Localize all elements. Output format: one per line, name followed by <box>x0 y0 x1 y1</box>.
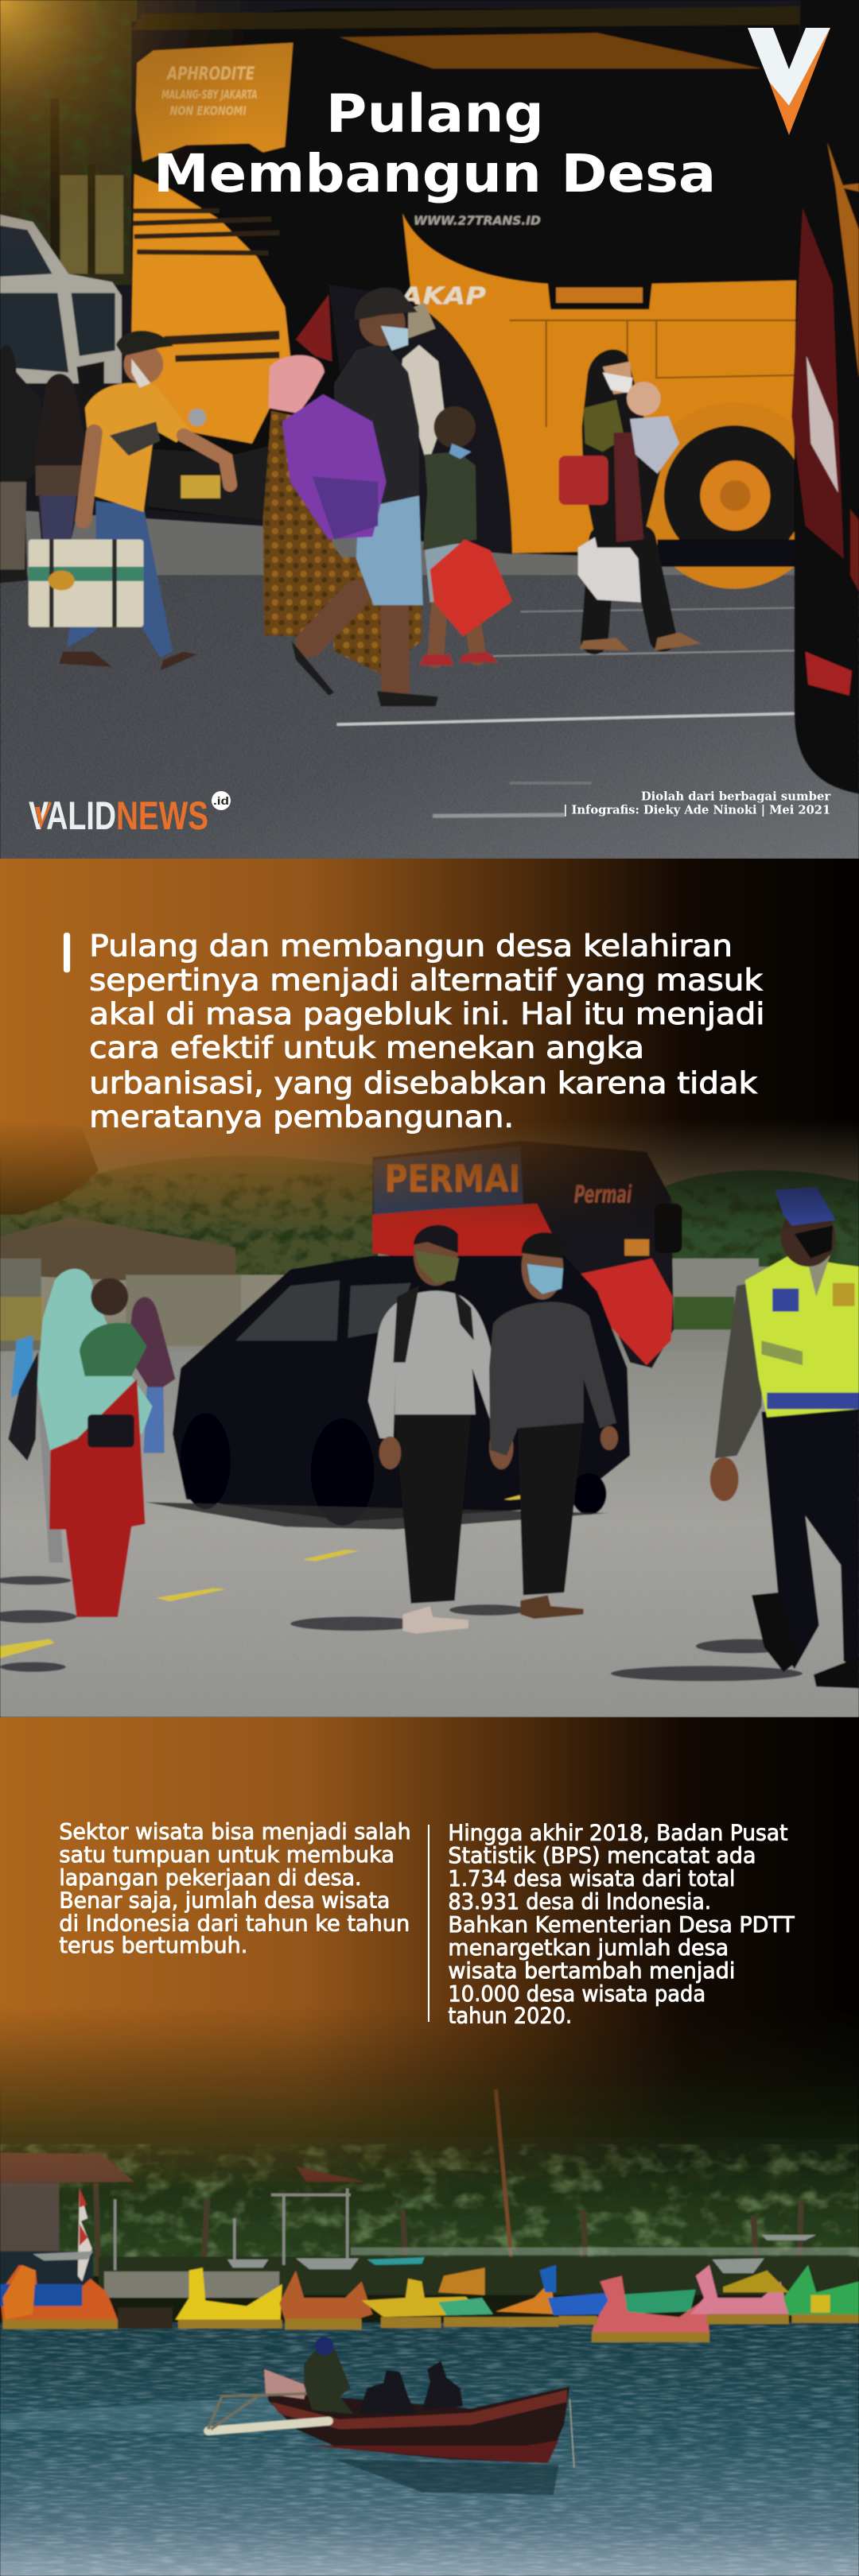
woman with child and others <box>8 1269 175 1617</box>
right text column: 10.000 desa wisata pada <box>448 1981 705 2007</box>
traffic police officer <box>710 1187 859 1689</box>
red bus: Permai <box>574 1181 632 1209</box>
dark-to-amber gradient block <box>0 859 859 1231</box>
arrivals photo: travellers at terminal <box>0 859 859 1717</box>
woman passenger <box>359 2370 416 2414</box>
right text column: tahun 2020. <box>448 2003 572 2028</box>
logo: Validnews: VALID <box>29 793 116 838</box>
left text column: terus bertumbuh. <box>59 1933 247 1958</box>
man with purple backpack <box>282 288 438 707</box>
dark-to-amber gradient block <box>0 1717 859 2199</box>
windscreen lettering <box>161 64 258 118</box>
windscreen lettering: NON EKONOMI <box>170 104 247 118</box>
cardboard box <box>29 539 143 627</box>
panel: tourism villages text over lake photo <box>0 1717 859 2576</box>
buildings <box>0 1217 235 1280</box>
pale lake gap <box>351 2248 859 2255</box>
male passenger <box>422 2361 463 2410</box>
logo: Validnews: NEWS <box>116 793 208 838</box>
logo: V mark <box>748 28 830 135</box>
canoe <box>208 2337 574 2468</box>
road surface <box>0 564 859 859</box>
child with red bag <box>419 406 512 665</box>
right text column: 83.931 desa di Indonesia. <box>448 1889 711 1915</box>
flag <box>78 2188 92 2281</box>
right text column <box>448 1820 795 2028</box>
right bus tail <box>791 0 859 794</box>
bus front lower <box>131 174 290 444</box>
left text column: lapangan pekerjaan di desa. <box>59 1865 362 1891</box>
pavilion <box>115 2188 351 2271</box>
intro paragraph <box>89 929 765 1135</box>
credits: | Infografis: Dieky Ade Ninoki | Mei 2021 <box>563 803 830 817</box>
man in yellow shirt <box>59 331 230 671</box>
sky <box>0 1078 859 1220</box>
yellow road dashes <box>0 1493 531 1658</box>
water <box>0 2322 859 2576</box>
bus side swoosh <box>402 214 800 553</box>
intro paragraph: meratanya pembangunan. <box>89 1100 514 1135</box>
panel seams <box>510 320 800 427</box>
right text column: Bahkan Kementerian Desa PDTT <box>448 1912 795 1938</box>
right text column: Statistik (BPS) mencatat ada <box>448 1843 756 1868</box>
pavement behind people <box>0 510 795 575</box>
tree line right <box>663 1170 859 1267</box>
left text column: di Indonesia dari tahun ke tahun <box>59 1911 410 1937</box>
logo: Validnews <box>29 791 231 838</box>
intro paragraph: sepertinya menjadi alternatif yang masuk <box>89 962 763 997</box>
left text column: satu tumpuan untuk membuka <box>59 1842 395 1868</box>
left parked vehicle <box>0 215 122 383</box>
left text column <box>59 1819 411 1958</box>
shadows <box>0 1576 803 1682</box>
logo: Validnews: .id <box>213 794 229 807</box>
boat driver <box>304 2347 353 2414</box>
right text column: Hingga akhir 2018, Badan Pusat <box>448 1820 788 1845</box>
intro paragraph: akal di masa pagebluk ini. Hal itu menjadi <box>89 996 765 1031</box>
right text column: 1.734 desa wisata dari total <box>448 1866 735 1891</box>
bus side lettering: WWW.27TRANS.ID <box>414 213 541 227</box>
bus windscreen orange <box>136 43 293 161</box>
quote bar <box>64 933 70 972</box>
AKAP lettering: AKAP <box>399 282 486 310</box>
column divider <box>428 1825 430 2022</box>
warm light over top-left <box>0 0 263 263</box>
windscreen lettering: MALANG-SBY JAKARTA <box>161 87 258 102</box>
lake photo: swan boats and canoe <box>0 1991 859 2576</box>
left hut <box>0 2153 134 2290</box>
title <box>154 83 716 204</box>
swan boats <box>0 2235 859 2342</box>
window strip <box>550 274 649 308</box>
man in grey sweater <box>368 1225 513 1634</box>
woman carrying baby <box>559 350 702 650</box>
road <box>0 1329 859 1717</box>
front grille slats <box>133 211 279 359</box>
road lines <box>337 608 795 816</box>
wall <box>126 1274 241 1346</box>
wake <box>0 2396 307 2432</box>
forest <box>0 2057 859 2276</box>
tree line left <box>0 1156 378 1274</box>
windscreen lettering: APHRODITE <box>166 64 255 84</box>
wheel <box>641 402 827 588</box>
bus lower front bumper <box>148 446 269 520</box>
title: Membangun Desa <box>154 143 716 204</box>
intro paragraph: Pulang dan membangun desa kelahiran <box>89 929 733 964</box>
tree trunks and flagpole <box>96 2089 801 2287</box>
man with rear white shirt <box>400 345 445 465</box>
panel: intro text over arrivals photo <box>0 859 859 1717</box>
shadow under the car <box>146 1502 608 1530</box>
boat reflection <box>334 2459 559 2495</box>
woman in pink headscarf <box>263 355 422 673</box>
trees at top-left <box>0 0 137 285</box>
credits <box>563 789 831 817</box>
tree top-left <box>0 1122 99 1215</box>
ground strip <box>99 2256 859 2295</box>
credits: Diolah dari berbagai sumber <box>641 789 831 803</box>
dark panel under the swoosh <box>328 285 512 554</box>
intro paragraph: cara efektif untuk menekan angka <box>89 1030 644 1065</box>
bus roof stripe <box>340 33 761 68</box>
boat hull bases <box>2 2314 859 2342</box>
bus body dark <box>131 8 800 564</box>
canopies <box>33 2235 816 2273</box>
hero photo: bus terminal with travellers <box>0 0 859 859</box>
red bus <box>372 1141 682 1368</box>
left background travellers <box>0 345 41 584</box>
left text column: Benar saja, jumlah desa wisata <box>59 1888 390 1914</box>
man in dark sweater <box>489 1232 618 1619</box>
black car <box>173 1255 630 1526</box>
title: Pulang <box>326 83 544 144</box>
red bus: PERMAI <box>385 1158 520 1201</box>
panel: hero photo with title <box>0 0 859 859</box>
left text column: Sektor wisata bisa menjadi salah <box>59 1819 411 1845</box>
tail light <box>296 295 332 362</box>
right text column: menargetkan jumlah desa <box>448 1935 729 1961</box>
intro paragraph: urbanisasi, yang disebabkan karena tidak <box>89 1065 757 1100</box>
right text column: wisata bertambah menjadi <box>448 1958 735 1984</box>
